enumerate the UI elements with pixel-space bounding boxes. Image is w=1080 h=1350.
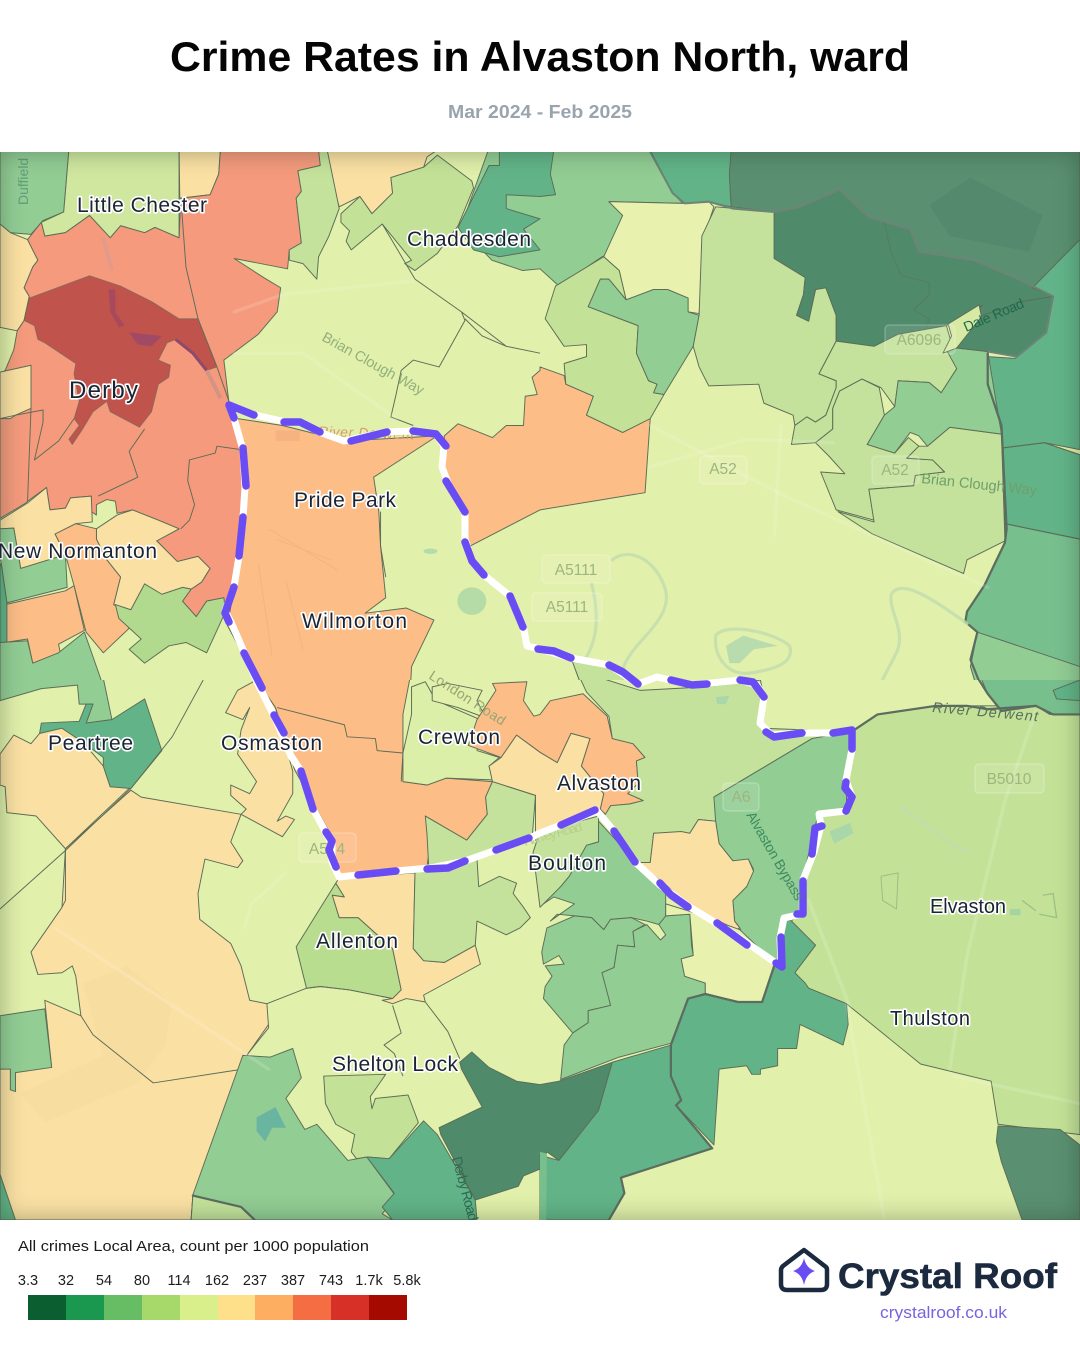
place labels: Derby	[69, 377, 138, 404]
legend values: 237	[243, 1273, 267, 1289]
map edge vignette	[0, 152, 1080, 1220]
map quadrant: south east regions	[533, 670, 1080, 1220]
road names under the ward boundary	[318, 423, 584, 849]
road names: Brian Clough Way	[319, 330, 427, 399]
place labels: Osmaston	[221, 732, 322, 755]
title: Crime Rates in Alvaston North, ward	[170, 33, 910, 80]
road number badges: A6	[732, 789, 750, 806]
map south half regions	[0, 670, 1080, 1220]
road number badges: A514	[309, 841, 345, 858]
choropleth map	[0, 150, 1080, 1223]
legend swatches	[28, 1295, 407, 1320]
place labels: Allenton	[316, 930, 398, 953]
place labels: Chaddesden	[407, 228, 531, 251]
website url: crystalroof.co.uk	[880, 1304, 1008, 1322]
road names: Dale Road	[961, 295, 1026, 335]
legend values: 114	[167, 1273, 191, 1289]
legend values: 3.3	[18, 1273, 38, 1289]
subtitle: date range: Mar 2024 - Feb 2025	[448, 102, 632, 122]
legend values: 387	[281, 1273, 305, 1289]
map quadrant: south west regions	[0, 670, 645, 1220]
road names under the ward boundary: Harvey Road	[522, 819, 584, 849]
place labels: New Normanton	[0, 540, 157, 563]
legend values: 743	[319, 1273, 343, 1289]
legend values: 5.8k	[393, 1273, 421, 1289]
place labels: Boulton	[528, 852, 606, 875]
road number badges	[299, 325, 1044, 862]
place labels: Pride Park	[294, 489, 396, 512]
road names: London Road	[426, 667, 509, 728]
legend values: 1.7k	[355, 1273, 383, 1289]
legend values	[18, 1273, 421, 1289]
road names: Duffield	[15, 158, 31, 205]
road names	[15, 158, 1040, 1223]
legend values: 162	[205, 1273, 229, 1289]
place labels: Elvaston	[930, 896, 1006, 918]
logo wordmark: Crystal Roof	[838, 1257, 1057, 1296]
place labels: Wilmorton	[302, 610, 407, 633]
map north half regions	[0, 150, 1080, 701]
road names: River Derwent	[932, 700, 1040, 725]
road number badges: A6096	[897, 332, 941, 349]
place labels: Crewton	[418, 726, 500, 749]
place labels: Thulston	[890, 1008, 970, 1030]
road names: Brian Clough Way	[921, 471, 1038, 499]
legend values: 80	[134, 1273, 150, 1289]
map quadrant: north east regions	[458, 150, 1080, 701]
road names: Alvaston Bypass	[743, 808, 807, 903]
road number badges: A52	[881, 462, 909, 479]
ward boundary: Alvaston North	[225, 405, 852, 967]
legend values: 54	[96, 1273, 112, 1289]
legend: colour scale	[18, 1273, 421, 1320]
place labels: Peartree	[48, 732, 133, 755]
road names under the ward boundary: River Derwent	[318, 423, 416, 442]
icon: Crystal Roof house logo	[781, 1250, 827, 1290]
road number badges: A5111	[546, 599, 588, 616]
road names: Derby Road	[449, 1155, 482, 1223]
road number badges: B5010	[987, 771, 1032, 788]
place labels	[0, 194, 1006, 1076]
map quadrant: north west regions	[0, 150, 650, 701]
legend title: All crimes Local Area, count per 1000 population	[18, 1238, 369, 1255]
place labels: Little Chester	[77, 194, 207, 217]
place labels: Alvaston	[557, 772, 641, 795]
road number badges: A5111	[555, 562, 597, 579]
legend values: 32	[58, 1273, 74, 1289]
place labels: Shelton Lock	[332, 1053, 458, 1076]
road number badges: A52	[709, 461, 737, 478]
